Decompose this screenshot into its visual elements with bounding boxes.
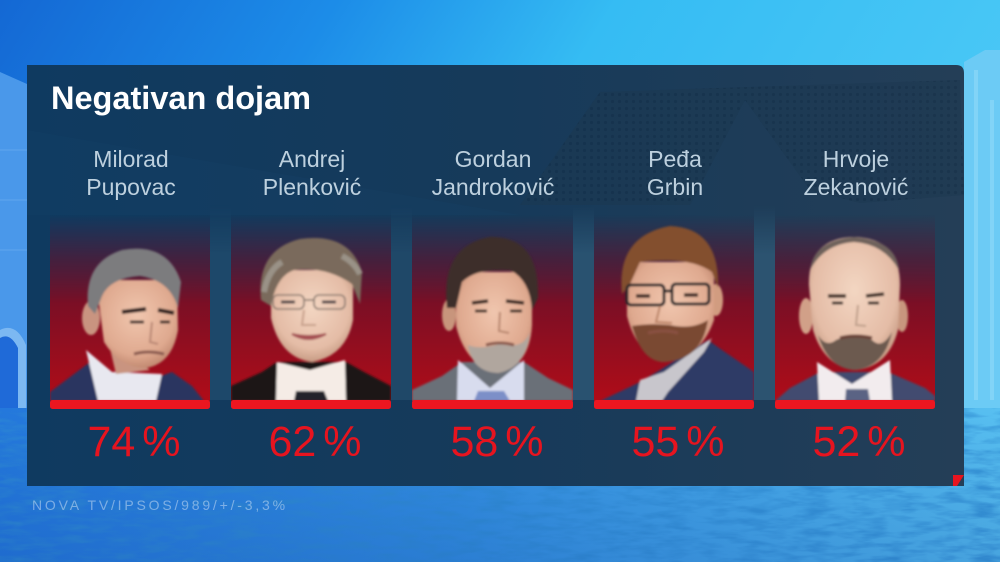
card: Gordan Jandroković portrait [412,205,573,409]
card: Andrej Plenković portrait [231,205,391,409]
value: Milorad Pupovac: 74 % [87,418,181,466]
card: Hrvoje Zekanović portrait [775,205,935,409]
value: Peđa Grbin: 55 % [631,418,725,466]
name: Milorad Pupovac: Pupovac [86,174,176,200]
name: Andrej Plenković: Andrej [279,146,345,172]
value: Hrvoje Zekanović: 52 % [812,418,906,466]
name: Peđa Grbin: Grbin [647,174,703,200]
name: Andrej Plenković: Plenković [263,174,361,200]
card: Peđa Grbin portrait [594,205,754,409]
panel [27,65,964,486]
name: Hrvoje Zekanović: Zekanović [804,174,908,200]
name: Peđa Grbin: Peđa [648,146,702,172]
red corner accent [953,475,964,486]
name: Hrvoje Zekanović: Hrvoje [823,146,889,172]
card: Milorad Pupovac portrait [50,205,210,409]
name: Gordan Jandroković: Jandroković [432,174,554,200]
value: Andrej Plenković: 62 % [268,418,362,466]
building silhouette in panel [27,80,964,400]
name: Milorad Pupovac: Milorad [93,146,169,172]
name: Gordan Jandroković: Gordan [455,146,531,172]
value: Gordan Jandroković: 58 % [450,418,544,466]
source line: NOVA TV/IPSOS/989/+/-3,3% [32,497,288,513]
title: Negativan dojam [51,80,311,116]
